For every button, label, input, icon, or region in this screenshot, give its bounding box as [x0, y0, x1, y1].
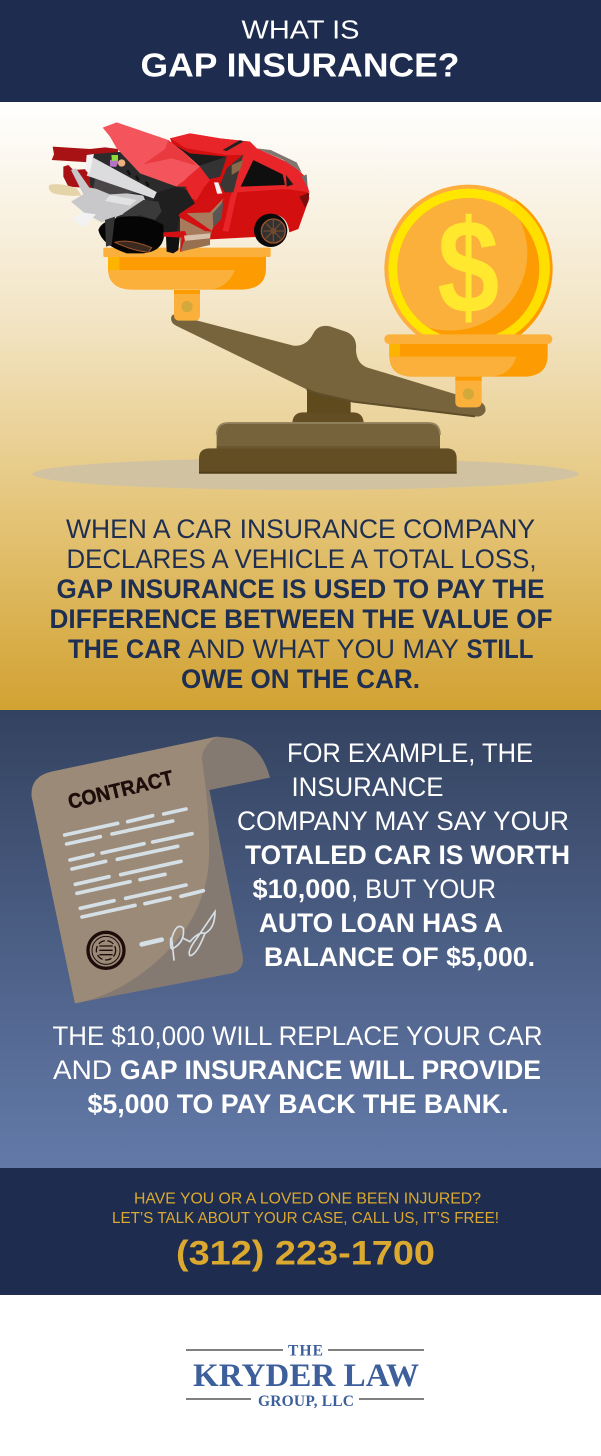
left pan	[103, 248, 271, 321]
logo: the kryder law group: GROUP, LLC	[258, 1393, 354, 1410]
text block: example: FOR EXAMPLE, THE	[287, 738, 533, 768]
rear wheel	[254, 214, 287, 247]
torn red bumper pieces	[52, 147, 118, 162]
panel: call to action: LET’S TALK ABOUT YOUR CASE, CALL US, IT’S FREE!	[112, 1210, 499, 1227]
scale beam	[171, 314, 486, 417]
right pan	[384, 334, 552, 407]
logo: the kryder law group: KRYDER LAW	[193, 1358, 419, 1394]
text block: outcome: $5,000 TO PAY BACK THE BANK.	[88, 1089, 508, 1119]
text block: definition	[50, 514, 552, 694]
front wheel	[98, 216, 180, 253]
signature	[142, 912, 215, 960]
text block: example: $10,000	[252, 874, 350, 904]
scale base	[199, 388, 457, 474]
contract title: CONTRACT	[66, 766, 176, 814]
text block: example: BALANCE OF $5,000.	[264, 942, 535, 972]
heading: what is: WHAT IS	[242, 14, 360, 44]
text block: example: INSURANCE	[292, 772, 444, 802]
text block: definition: DECLARES A VEHICLE A TOTAL LOSS,	[66, 544, 536, 574]
crumpled hood	[103, 122, 210, 200]
logo: the kryder law group: THE	[288, 1342, 323, 1360]
torn door with brown interior	[163, 193, 223, 252]
ground shadow	[32, 458, 578, 490]
text block: outcome: THE $10,000 WILL REPLACE YOUR CAR	[52, 1021, 542, 1051]
panel: header	[0, 0, 601, 102]
text block: example: AUTO LOAN HAS A	[259, 908, 503, 938]
paper sheet	[32, 737, 270, 1003]
contract text lines	[65, 809, 203, 917]
panel: gold gradient section	[0, 102, 601, 710]
panel: blue example section	[0, 710, 601, 1168]
text block: example	[237, 738, 570, 972]
text block: example: COMPANY MAY SAY YOUR	[237, 806, 569, 836]
logo: the kryder law group	[186, 1342, 424, 1410]
illustration: wrecked car on left pan	[49, 122, 309, 321]
text block: definition: WHEN A CAR INSURANCE COMPANY	[66, 514, 535, 544]
phone number: (312) 223-1700	[176, 1234, 435, 1272]
text block: definition: GAP INSURANCE IS USED TO PAY THE	[56, 574, 544, 604]
dark engine mass	[123, 187, 195, 233]
engine bottles	[110, 155, 125, 167]
car body	[170, 133, 309, 239]
text block: example: , BUT YOUR	[351, 874, 496, 904]
seal	[88, 932, 124, 968]
text block: definition: AND WHAT YOU MAY	[188, 634, 459, 664]
call to action text: HAVE YOU OR A LOVED ONE BEEN INJURED?	[134, 1190, 481, 1208]
text block: outcome	[52, 1021, 542, 1119]
text block: outcome: AND	[53, 1055, 112, 1085]
coin	[384, 184, 553, 334]
text block: definition: OWE ON THE CAR.	[181, 664, 420, 694]
text block: outcome: GAP INSURANCE WILL PROVIDE	[120, 1055, 541, 1085]
panel: call to action	[0, 1168, 601, 1295]
text block: example: TOTALED CAR IS WORTH	[245, 840, 570, 870]
illustration: balance scale	[171, 176, 553, 474]
text block: definition: STILL	[466, 634, 534, 664]
text block: definition: DIFFERENCE BETWEEN THE VALUE OF	[50, 604, 552, 634]
grey chassis parts	[71, 154, 158, 228]
engine bay	[90, 152, 193, 238]
dollar sign: $	[437, 193, 499, 342]
icon: contract document	[32, 737, 270, 1003]
heading: gap insurance: GAP INSURANCE?	[140, 48, 460, 84]
windshield and cabin	[172, 140, 243, 194]
beige debris	[49, 184, 82, 196]
text block: definition: THE CAR	[68, 634, 181, 664]
